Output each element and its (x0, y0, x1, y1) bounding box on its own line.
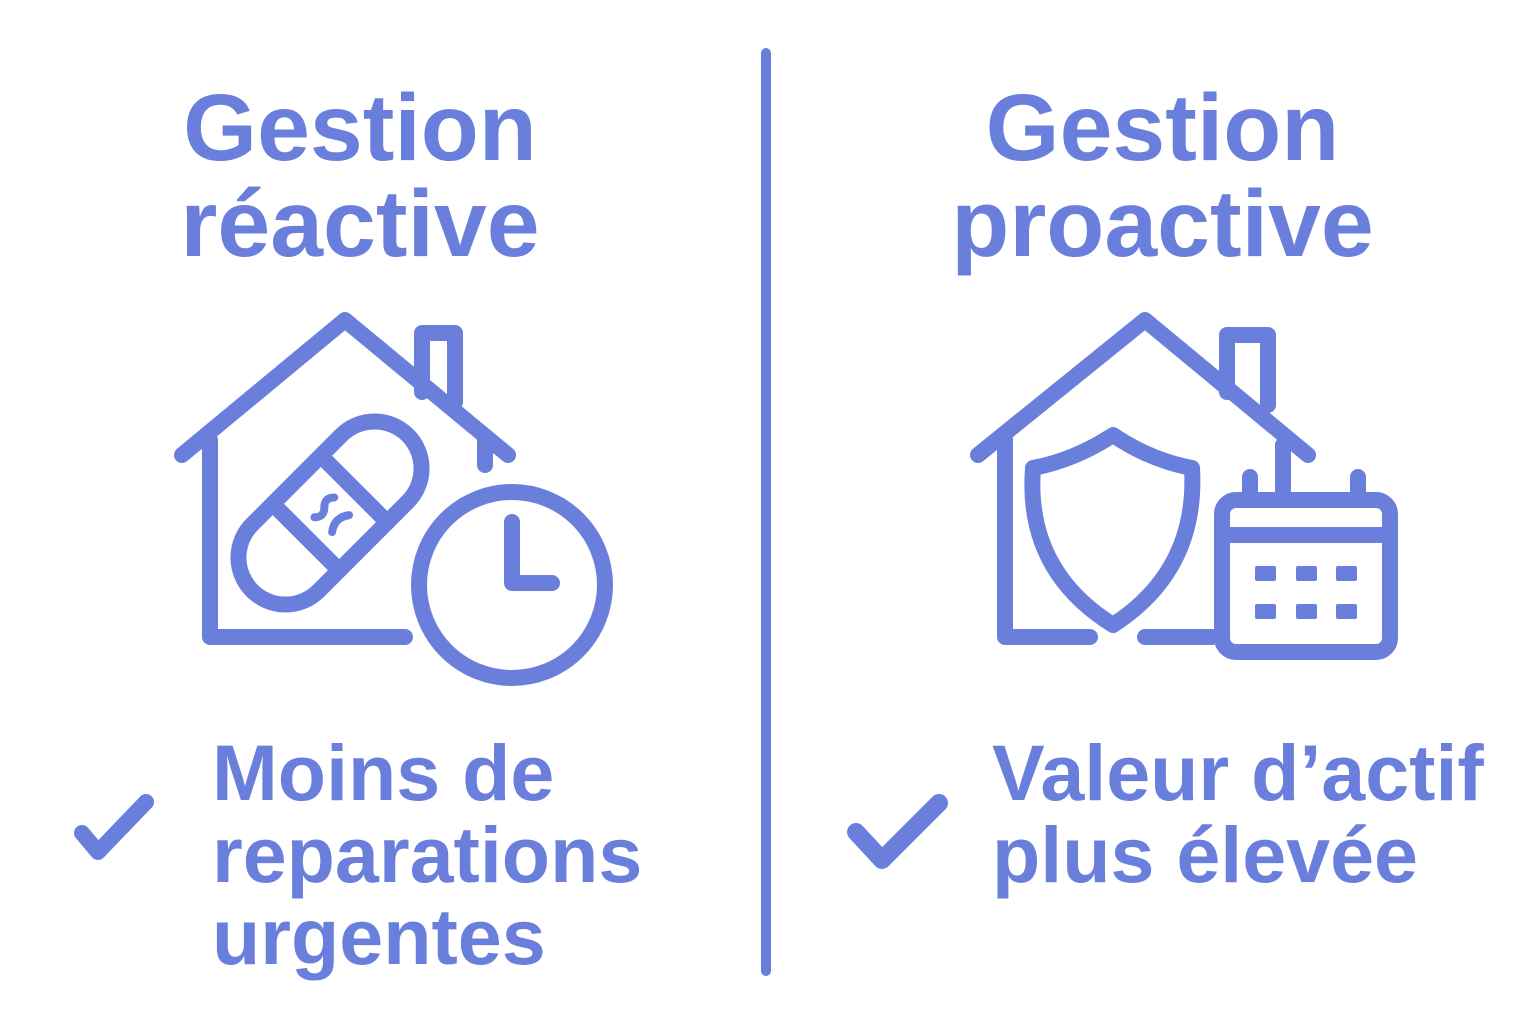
text: proactive benefit: plus élevée (992, 810, 1418, 899)
divider (761, 48, 771, 976)
icon: house with shield and calendar (978, 320, 1390, 652)
text: proactive benefit (992, 728, 1484, 899)
icon: house with bandage and clock (182, 320, 605, 678)
title: reactive: réactive (180, 171, 540, 277)
title: proactive: proactive (951, 171, 1374, 277)
title: proactive: Gestion (986, 75, 1339, 181)
text: proactive benefit: Valeur d’actif (992, 728, 1484, 817)
text: reactive benefit: Moins de (212, 728, 554, 817)
title: reactive (180, 75, 540, 277)
icon: check right (856, 803, 939, 860)
title: reactive: Gestion (183, 75, 537, 181)
icon: check left (82, 802, 146, 852)
text: reactive benefit: reparations (212, 810, 642, 899)
text: reactive benefit (212, 728, 642, 981)
title: proactive (951, 75, 1374, 277)
text: reactive benefit: urgentes (212, 892, 546, 981)
